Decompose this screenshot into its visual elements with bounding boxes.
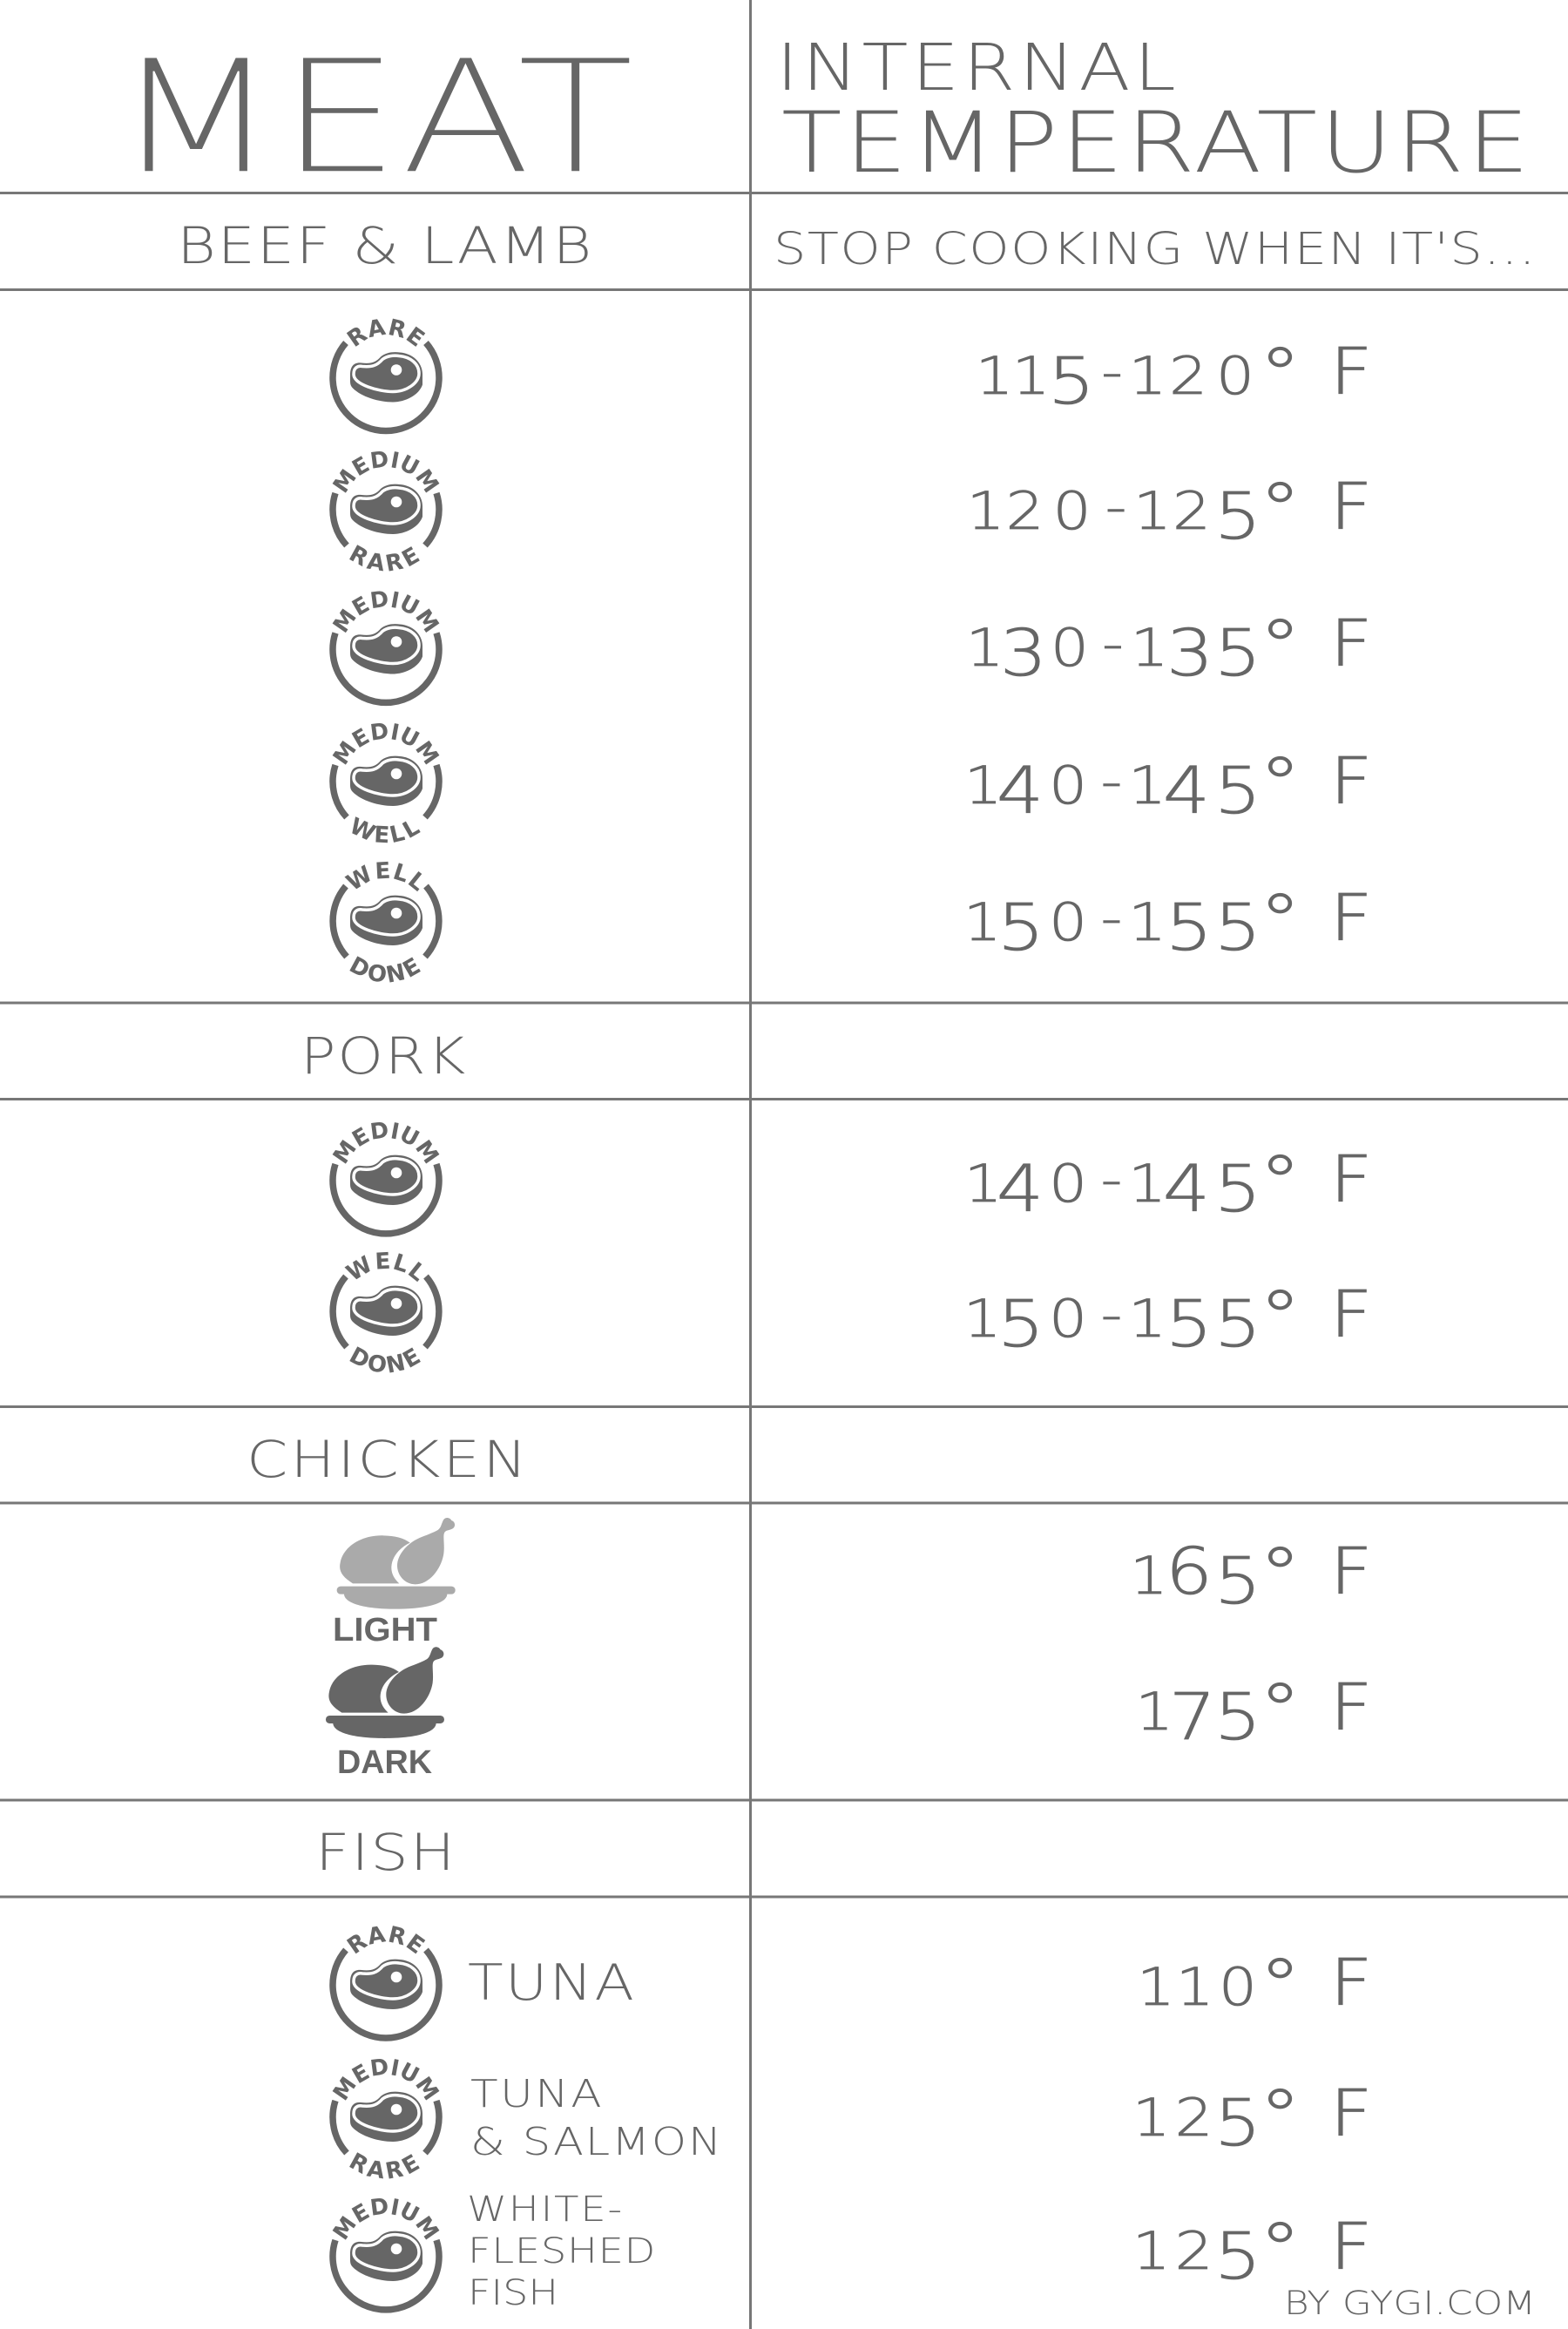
icon: fish medium rare: RARE	[349, 2152, 420, 2178]
temperature: tuna and salmon 125: F	[1330, 2075, 1373, 2151]
temperature: pork 140-145: 0-1	[1049, 1149, 1166, 1215]
temperature: 130-135: F	[1330, 606, 1373, 681]
icon: fish medium rare	[329, 2059, 443, 2178]
temperature: white fish 125: °	[1259, 2206, 1301, 2292]
icon: medium rare: MEDIUM	[333, 451, 439, 493]
temperature: 120-125: 120-12	[967, 477, 1211, 542]
temperature: pork 150-155: 5	[997, 1286, 1044, 1362]
icon: dark chicken: DARK	[337, 1744, 433, 1781]
temperature: 130-135: 1	[966, 618, 1004, 679]
heading: stop cooking: STOP COOKING WHEN IT'S...	[774, 224, 1537, 275]
temperature: pork 150-155: 5	[1166, 1286, 1213, 1362]
icon: well done: DONE	[349, 956, 421, 983]
temperature: chicken light 165: F	[1330, 1533, 1373, 1609]
label: tuna: TUNA	[468, 1954, 636, 2012]
icon: rare	[329, 319, 443, 434]
icon: fish rare	[329, 1926, 443, 2041]
icon: medium rare: RARE	[349, 545, 420, 572]
temperature: tuna and salmon 125: 5	[1214, 2085, 1261, 2161]
temperature: white fish 125: F	[1330, 2209, 1373, 2285]
icon: pork well done	[329, 1251, 443, 1373]
temperature: 150-155: °	[1259, 877, 1301, 964]
temperature: chicken dark 175: 5	[1214, 1679, 1261, 1755]
temperature: 140-145: 1	[964, 755, 1003, 816]
icon: fish rare: RARE	[347, 1926, 425, 1953]
temperature: pork 150-155: 5	[1214, 1286, 1261, 1362]
icon: medium	[329, 591, 443, 706]
icon: medium: MEDIUM	[333, 591, 439, 633]
temperature: 140-145: 5	[1214, 753, 1261, 829]
temperature: 130-135: 5	[1214, 615, 1261, 691]
temperature: pork 140-145: F	[1330, 1141, 1373, 1217]
temperature: tuna and salmon 125: °	[1259, 2073, 1301, 2159]
temperature: pork 140-145: 5	[1214, 1151, 1261, 1227]
temperature: chicken light 165: 6	[1166, 1533, 1213, 1609]
icon: medium well	[329, 723, 443, 843]
temperature: 120-125: 5	[1214, 478, 1261, 554]
label: white-fleshed fish: FISH	[468, 2273, 558, 2313]
temperature: 140-145: °	[1259, 741, 1301, 827]
temperature: chicken light 165: 1	[1130, 1546, 1168, 1607]
temperature: 140-145: 0-1	[1049, 751, 1166, 816]
temperature: pork 140-145: °	[1259, 1139, 1301, 1225]
temperature: pork 140-145: 4	[997, 1151, 1044, 1227]
heading: pork: PORK	[301, 1026, 467, 1086]
label: white-fleshed fish	[467, 2190, 656, 2313]
temperature: 115-120: 11	[976, 346, 1051, 407]
temperature: 115-120: 5	[1048, 343, 1095, 419]
icon: dark chicken	[326, 1647, 444, 1781]
heading: chicken: CHICKEN	[247, 1430, 530, 1489]
temperature: 140-145: F	[1330, 743, 1373, 819]
temperature: 130-135: 0-1	[1051, 613, 1168, 679]
credit: BY GYGI.COM	[1284, 2285, 1536, 2322]
temperature: chicken dark 175: °	[1259, 1667, 1301, 1753]
temperature: white fish 125: 5	[1214, 2218, 1261, 2294]
temperature: 150-155: 5	[997, 890, 1044, 965]
temperature: 150-155: 1	[963, 892, 1002, 953]
icon: pork medium: MEDIUM	[333, 1122, 439, 1164]
icon: fish medium: MEDIUM	[333, 2198, 439, 2240]
temperature: 140-145: 4	[1163, 753, 1210, 829]
icon: medium rare	[329, 451, 443, 572]
temperature: 150-155: F	[1330, 880, 1373, 956]
icon: fish medium rare: MEDIUM	[333, 2059, 439, 2101]
icon: pork well done: WELL	[345, 1251, 422, 1283]
temperature: 150-155: 0-1	[1049, 888, 1166, 953]
title: MEAT: MEAT	[113, 27, 634, 209]
temperature: 130-135: 3	[1166, 615, 1213, 691]
label: white-fleshed fish: FLESHED	[468, 2231, 656, 2271]
temperature: pork 140-145: 4	[1163, 1151, 1210, 1227]
temperature: 120-125: F	[1330, 469, 1373, 545]
title: INTERNAL: INTERNAL	[776, 30, 1179, 105]
icon: fish medium	[329, 2198, 443, 2313]
temperature: 120-125: °	[1259, 466, 1301, 552]
icon: medium well: MEDIUM	[333, 723, 439, 765]
temperature: tuna and salmon 125: 12	[1132, 2088, 1213, 2149]
icon: rare: RARE	[347, 319, 425, 347]
temperature: chicken light 165: °	[1259, 1531, 1301, 1617]
icon: well done	[329, 861, 443, 983]
label: tuna and salmon: TUNA	[470, 2072, 604, 2116]
label: white-fleshed fish: WHITE-	[467, 2190, 624, 2230]
temperature: 130-135: 3	[1000, 615, 1047, 691]
temperature: 115-120: -120	[1101, 342, 1254, 407]
label: tuna and salmon: & SALMON	[470, 2120, 723, 2164]
icon: well done: WELL	[345, 861, 422, 892]
temperature: 150-155: 5	[1166, 890, 1213, 965]
heading: fish: FISH	[315, 1823, 456, 1882]
temperature: chicken dark 175: F	[1330, 1669, 1373, 1745]
temperature: chicken light 165: 5	[1214, 1543, 1261, 1619]
label: tuna and salmon	[470, 2072, 723, 2164]
temperature: chicken dark 175: 1	[1135, 1682, 1173, 1743]
temperature: 115-120: °	[1259, 331, 1301, 417]
temperature: pork 140-145: 1	[964, 1154, 1003, 1215]
temperature: 115-120: F	[1330, 334, 1373, 410]
icon: pork medium	[329, 1122, 443, 1237]
icon: light chicken: LIGHT	[333, 1612, 437, 1649]
icon: pork well done: DONE	[349, 1346, 421, 1373]
temperature: 150-155: 5	[1214, 890, 1261, 965]
temperature: pork 150-155: 0-1	[1049, 1284, 1166, 1350]
temperature: pork 150-155: °	[1259, 1274, 1301, 1360]
temperature: white fish 125: 12	[1132, 2221, 1213, 2282]
temperature: 140-145: 4	[997, 753, 1044, 829]
icon: medium well: WELL	[352, 816, 421, 843]
temperature: tuna 110: 110	[1137, 1957, 1257, 2018]
temperature: chicken dark 175: 7	[1169, 1679, 1216, 1755]
title: TEMPERATURE: TEMPERATURE	[781, 94, 1532, 192]
temperature: tuna 110: F	[1330, 1945, 1373, 2021]
temperature: pork 150-155: F	[1330, 1276, 1373, 1352]
icon: light chicken	[333, 1518, 456, 1649]
heading: beef and lamb: BEEF & LAMB	[177, 216, 593, 275]
temperature: pork 150-155: 1	[963, 1289, 1002, 1350]
temperature: 130-135: °	[1259, 603, 1301, 689]
temperature: tuna 110: °	[1259, 1942, 1301, 2028]
